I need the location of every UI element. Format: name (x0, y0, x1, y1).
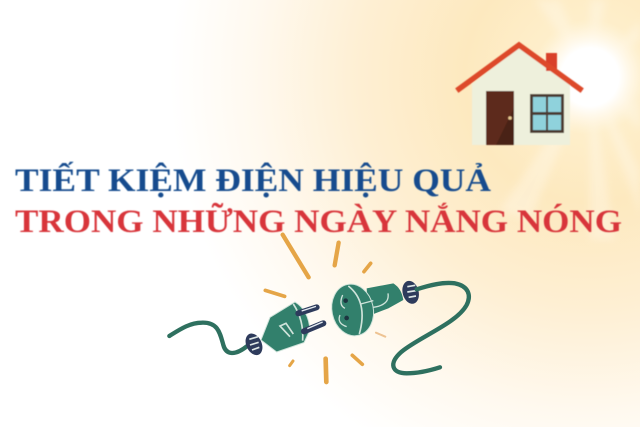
plug pins (298, 307, 317, 313)
illustration: plug and socket (169, 235, 469, 382)
socket neck (367, 283, 403, 316)
plug body (261, 302, 310, 352)
title (15, 160, 622, 240)
plug strain relief (242, 331, 266, 358)
icon: house (459, 45, 580, 145)
door (486, 91, 514, 145)
chimney (546, 53, 557, 71)
socket holes (343, 298, 348, 303)
window (530, 94, 564, 133)
house wall (472, 48, 570, 145)
socket (327, 279, 421, 340)
left cord (169, 323, 247, 353)
title line 1: TIẾT KIỆM ĐIỆN HIỆU QUẢ (15, 160, 491, 199)
roof (459, 45, 580, 89)
socket strain relief (400, 279, 421, 306)
socket head (327, 280, 378, 340)
spark rays (265, 235, 385, 382)
plug (242, 302, 323, 358)
title line 2: TRONG NHỮNG NGÀY NẮNG NÓNG (15, 201, 622, 240)
sun glow (532, 19, 640, 135)
right cord (393, 283, 469, 373)
